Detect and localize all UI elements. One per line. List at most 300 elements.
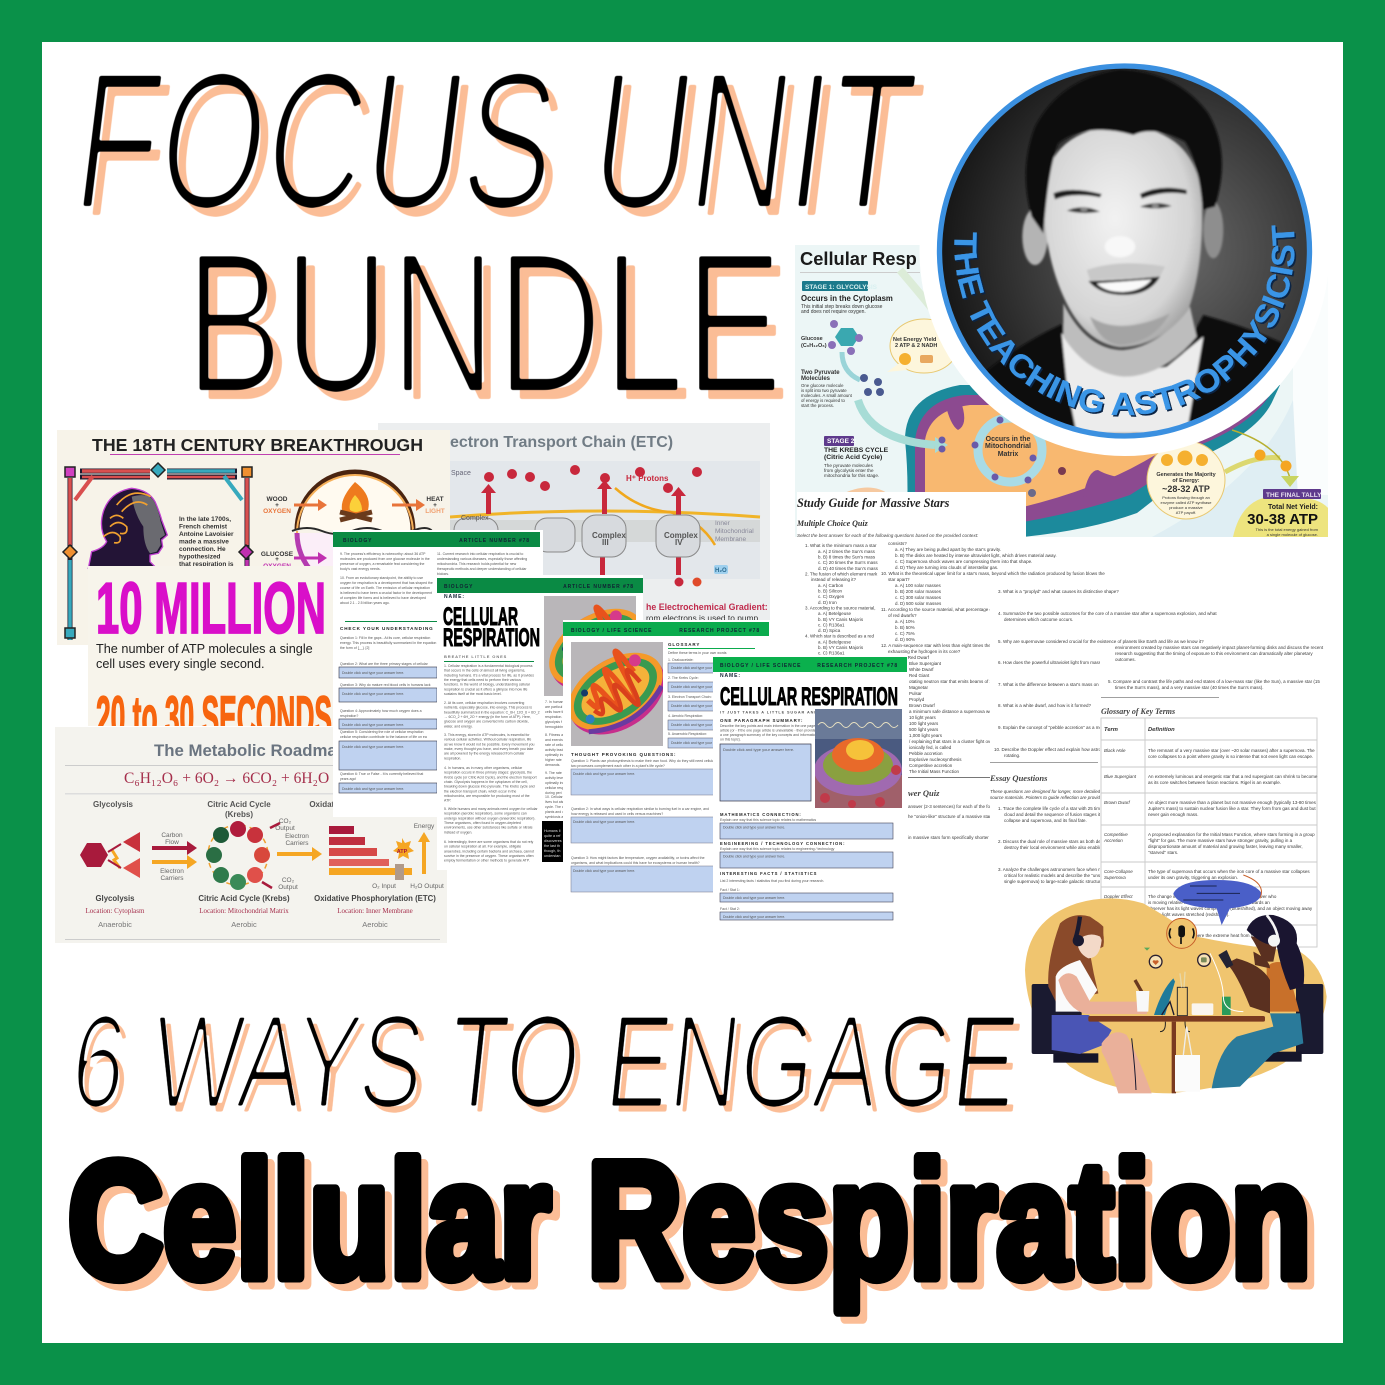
text block: article paragraphs: respiration. xyxy=(444,756,461,760)
quiz column two: otating neutron star that emits beams of X xyxy=(909,679,993,684)
quiz column one: 2. The fusion of which element mark xyxy=(805,572,878,576)
glossary table: "fight" for gas. The more massive stars have stronger gravity, pulling in a xyxy=(1148,838,1293,843)
text block: article paragraphs: chain. Glycolysis happens in the cytoplasm of the cell, xyxy=(444,780,528,784)
essay questions continued page xyxy=(1100,645,1324,947)
title: cellular respiration: RESPIRATION xyxy=(443,624,540,652)
callout: final tally: This is the total energy gained from xyxy=(1256,527,1319,532)
glossary table: Accretion xyxy=(1103,838,1123,843)
text block: article paragraphs: molecules are produced from one glucose molecule in the xyxy=(340,557,430,561)
icon: podcast microphone xyxy=(1167,918,1197,948)
text block: Lavoisier: hypothesized xyxy=(179,554,221,560)
big number: 10 million: 10 MILLION xyxy=(96,569,326,649)
form: comprehension questions xyxy=(339,636,437,793)
quiz column two: 100 light years xyxy=(909,721,939,726)
text block: article paragraphs: understanding various diseases, especially those affecting xyxy=(437,557,527,561)
panel: the 18th century breakthrough slide xyxy=(57,430,450,645)
quiz column three: short answer questions: determines which outcome occurs. xyxy=(1004,617,1073,622)
icon: glucose molecule: Glucose xyxy=(801,336,823,342)
quiz column two: c. C) 300 solar masses xyxy=(895,595,942,600)
text block: article paragraphs: nutrients, especially glucose, into energy. This process is xyxy=(444,706,532,710)
quiz column two: b. B) 50% xyxy=(895,625,915,630)
quiz column two: / explaining that stars in a cluster fight ove xyxy=(909,739,993,744)
illustration: two women with podcast xyxy=(1025,875,1327,1093)
text block: article paragraphs: 9. The process's efficiency is noteworthy: about 36 ATP xyxy=(340,552,426,556)
essay questions section: 3. Analyze the challenges astronomers face when modeling xyxy=(998,867,1117,872)
glossary table: observer has its light waves compressed (blueshifted), and an object moving away xyxy=(1148,906,1313,911)
text block: two pyruvate: One glucose molecule xyxy=(801,383,844,388)
table with laptop and items xyxy=(1088,953,1265,1093)
panel: article worksheet page two: BREATHE LITTLE ONES xyxy=(444,654,507,659)
text block: article paragraphs: 6. Interestingly, there are some organisms that do not rely xyxy=(444,840,533,844)
text: article side column: demands. xyxy=(545,763,560,767)
text: article side column: 8. Fitness a xyxy=(545,733,563,737)
text: article side column: during peri xyxy=(545,791,562,795)
form: thought questions: Double click and type your answer here. xyxy=(573,820,635,824)
form: comprehension questions: the form of [__]. [2] xyxy=(340,646,369,650)
header bar: life science research: RESEARCH PROJECT #78 xyxy=(679,628,760,634)
text block: article paragraphs: respiration (aerobic respiration), some organisms can xyxy=(444,812,527,816)
essay questions section: cloud and detail the sequence of fusion stages it goes through xyxy=(1004,812,1128,817)
form: thought questions: two processes complement each other in a plant's life cycle? xyxy=(571,764,665,768)
text block: article paragraphs: instead of oxygen. xyxy=(444,830,472,834)
callout: net energy yield: Net Energy Yield xyxy=(893,337,936,343)
icon: portrait of Lavoisier xyxy=(88,488,167,568)
text block: article paragraphs: that occurs in the cells of almost all living organisms, xyxy=(444,669,525,673)
panel: electron transport chain slide xyxy=(378,423,770,623)
text block: Lavoisier: connection. He xyxy=(179,546,226,553)
text block: article paragraphs: is believed to have been a crucial factor in the development xyxy=(340,591,432,595)
badge: stage 1: STAGE 1: GLYCOLYSIS xyxy=(805,284,878,291)
heading: cellular respiration poster: Cellular Resp xyxy=(800,248,917,269)
text block: article paragraphs: breaking down glucose into pyruvate. The Krebs cycle and xyxy=(444,785,535,789)
form: connections and facts: Fact / Stat 2: xyxy=(720,907,740,911)
one paragraph summary: Describe the key points and main information in the one page xyxy=(720,724,815,728)
callout: final tally xyxy=(1233,489,1330,537)
labels: pathway names and locations: Location: Inner Membrane xyxy=(337,907,413,915)
panel: electron transport chain slide: rom electrons is used to pump xyxy=(646,613,759,623)
quiz column one: c. C) Oxygen xyxy=(818,594,845,599)
header bar: biology article: ARTICLE NUMBER #78 xyxy=(459,538,530,544)
labels: pathway names and locations: Anaerobic xyxy=(98,920,132,929)
text block: two pyruvate: Molecules xyxy=(801,376,831,382)
labels: pathway names and locations xyxy=(86,894,436,929)
panel: electron transport chain slide: Mitochondrial xyxy=(715,528,754,535)
form: comprehension questions: Question 1: Fill in the gaps - At its core, cellular respiration xyxy=(340,636,430,640)
callout: majority of energy: ATP payoff. xyxy=(1176,510,1196,515)
arrows: carbon flow and electron carriers: Electron xyxy=(160,868,184,875)
diagram: electron transport staircase: Energy xyxy=(414,823,435,830)
glossary list: GLOSSARY xyxy=(668,642,700,647)
quiz column one: d. D) 40 times the Sun's mass xyxy=(818,566,879,571)
callout: majority of energy: Protons flowing through an xyxy=(1162,495,1210,500)
diagram: electron transport staircase: O₂ Input xyxy=(372,883,396,890)
quiz column two xyxy=(878,538,1105,774)
form: thought questions: how energy is released and used in cells versus machines? xyxy=(571,812,663,816)
quiz column one: b. B) VY Canis Majoris xyxy=(818,617,864,622)
diagram: combustion vs respiration: GLUCOSE xyxy=(261,551,294,558)
heading: metabolic roadmap: The Metabolic Roadmap xyxy=(154,741,347,760)
title: focus unit: FOCUS UNIT xyxy=(64,33,926,250)
text block: article paragraphs xyxy=(340,552,527,605)
quiz column two: White Dwarf xyxy=(909,667,934,672)
quiz column two: of red dwarfs? xyxy=(888,613,917,618)
text block: article paragraphs: survive in the presence of oxygen. These organisms often xyxy=(444,854,534,858)
text block: stage 2: The pyruvate molecules xyxy=(824,463,873,468)
text: article side column: activity leve xyxy=(545,776,563,780)
form: comprehension questions: Double click and type your answer here. xyxy=(342,787,404,791)
quiz column three: short answer questions: 5. Why are supernovae considered crucial for the existence of planets like Earth and life as we know it? xyxy=(998,639,1204,644)
glossary table: Core-Collapse xyxy=(1104,869,1133,874)
form: connections and facts: ENGINEERING / TECHNOLOGY CONNECTION: xyxy=(720,841,845,846)
quiz column three: short answer questions: 7. What is the difference between a star's mass on the main sequence xyxy=(998,682,1138,687)
heading: breakthrough: THE 18TH CENTURY BREAKTHROUGH xyxy=(92,435,423,455)
glossary list: 4. Aerobic Respiration: xyxy=(668,714,703,718)
glossary table: Blue Supergiant xyxy=(1104,774,1137,779)
quiz column two: d. D) 90% xyxy=(895,637,915,642)
form: connections and facts: Double click and type your answer here. xyxy=(723,854,785,858)
image: mitochondrion illustration xyxy=(553,635,680,751)
text: article side column xyxy=(545,700,566,819)
text block: article paragraphs: ATP. xyxy=(444,799,451,803)
quiz column two: consists? xyxy=(888,541,907,546)
panel: study guide for massive stars: Select the best answer for each of the following questions based on the provided context: xyxy=(797,533,979,538)
text block: article paragraphs: 5. While humans and many animals need oxygen for cellular xyxy=(444,807,538,811)
text: article side column: higher rate xyxy=(545,758,562,762)
text block: article paragraphs: → 6CO_2 + 6H_2O + energy (in the form of ATP). Here, xyxy=(444,715,531,719)
diagram: combustion vs respiration: OXYGEN xyxy=(263,508,291,515)
arrows: carbon flow and electron carriers: Carriers xyxy=(160,875,184,882)
essay questions section: single supernova) to large-scale galactic structures xyxy=(1004,879,1106,884)
diagram: mitochondrion: Occurs in the xyxy=(986,436,1030,443)
quiz column two: Pebble accretion xyxy=(909,751,943,756)
form: comprehension questions: years ago! xyxy=(340,777,356,781)
diagram: combustion vs respiration: HEAT xyxy=(426,496,444,503)
quiz column one: 4. Which star is described as a red xyxy=(805,634,875,638)
form: comprehension questions: Double click and type your answer here. xyxy=(342,692,404,696)
labels: pathway names and locations: Oxidative Phosphorylation (ETC) xyxy=(314,894,436,903)
text: article side column: glycolysis f xyxy=(545,720,562,724)
glossary list xyxy=(668,642,755,748)
quiz column one: 1. What is the minimum mass a star xyxy=(805,543,877,548)
quiz column one: c. C) 20 times the Sun's mass xyxy=(818,560,878,565)
text block: stage 2: THE KREBS CYCLE xyxy=(824,447,889,454)
glossary table: A proposed explanation for the Initial Mass Function, where stars forming in a group xyxy=(1148,832,1315,837)
text: article side column: activity lead xyxy=(545,748,563,752)
text block: cytoplasm: and does not require oxygen. xyxy=(801,309,866,315)
text block: article paragraphs xyxy=(444,664,540,863)
icon: glucose molecule xyxy=(801,320,863,380)
text block: two pyruvate: start the process. xyxy=(801,403,834,408)
heading: study guide: Study Guide for Massive Stars xyxy=(797,496,950,510)
panel: 10 million slide xyxy=(88,566,333,726)
panel: electron transport chain slide: Space xyxy=(451,470,471,477)
header bar: life science research xyxy=(563,622,769,636)
quiz column two: a. A) 10% xyxy=(895,619,915,624)
diagram: combustion vs respiration: WOOD xyxy=(267,496,288,503)
quiz column one: b. B) VY Canis Majoris xyxy=(818,645,864,650)
glossary table: A massive supernova where the extreme heat from the xyxy=(1148,933,1258,938)
diagram: combustion vs respiration: + xyxy=(275,556,279,563)
callout: black fact box: quite a ref xyxy=(544,834,561,838)
text block: article paragraphs: mitochondria, are responsible for producing most of the xyxy=(444,794,530,798)
text block: article paragraphs: are all powered by the energy released from cellular xyxy=(444,752,525,756)
quiz column two: 12. A main-sequence star with less than eight times the xyxy=(881,643,991,648)
callout: black fact box: though, th xyxy=(544,849,560,853)
callout: net energy yield xyxy=(887,319,958,373)
quiz column one: c. C) R136a1 xyxy=(818,622,845,628)
one paragraph summary xyxy=(720,718,817,801)
callout: final tally: THE FINAL TALLY xyxy=(1266,492,1322,499)
callout: majority of energy: Generates the Majority xyxy=(1156,472,1217,478)
form: connections and facts: Double click and type your answer here. xyxy=(723,896,785,900)
title: bundle: BUNDLE xyxy=(185,212,783,435)
form: thought questions: Double click and type your answer here. xyxy=(573,772,635,776)
labels: pathway names and locations: Location: Mitochondrial Matrix xyxy=(199,907,289,915)
text block: two pyruvate: of energy is required to xyxy=(801,398,846,403)
form: connections and facts: Double click and type your answer here. xyxy=(723,826,785,830)
panel: metabolic roadmap slide: Citric Acid Cycle xyxy=(207,800,271,809)
text: short answer quiz fragments xyxy=(908,777,991,840)
text block: Lavoisier: In the late 1700s, xyxy=(179,516,231,523)
text: article side column: 9. The rate xyxy=(545,771,562,775)
text block: Lavoisier: made a massive xyxy=(179,538,229,546)
text: short answer quiz fragments: in massive stars form specifically shorter xyxy=(908,835,989,840)
glossary list: Double click and type your answer here. xyxy=(671,741,733,745)
text block: article paragraphs: course of life on Earth. The emission of cellular respiration xyxy=(340,586,430,590)
callout: majority of energy xyxy=(1147,441,1225,519)
form: connections and facts: Explain one way that this science topic relates to engineering / technology xyxy=(720,847,835,851)
arrows: carbon flow and electron carriers: Carbon xyxy=(161,832,183,839)
text block: article paragraphs: biology. xyxy=(437,572,449,576)
diagram: mitochondrion: Matrix xyxy=(998,451,1018,458)
text: 20 to 30 SECONDS xyxy=(96,685,332,750)
text block: article paragraphs: of complex life forms and is believed to have developed xyxy=(340,596,426,600)
header bar: biology article xyxy=(333,532,540,547)
header bar: research project: BIOLOGY / LIFE SCIENCE xyxy=(720,663,801,669)
quiz column two: Magnetar xyxy=(909,685,929,690)
glossary table: "starved" stars. xyxy=(1148,850,1178,855)
header bar: biology article number: ARTICLE NUMBER #78 xyxy=(563,584,634,590)
text block: article paragraphs: on cellular respiration at all. For example, obligate xyxy=(444,845,521,849)
image: mitochondrion illustration xyxy=(544,596,636,696)
panel: electron transport chain slide: H₂O xyxy=(715,568,727,574)
quiz column three: short answer questions: 6. How does the powerful ultraviolet light from massive stars affect xyxy=(998,660,1131,665)
form: comprehension questions: cellular respiration contribute to the balance of life on ea xyxy=(340,735,427,739)
form: connections and facts: Explain one way that this science topic relates to mathematics xyxy=(720,818,816,822)
header bar: research project xyxy=(713,657,907,672)
essay questions continued page: 5. Compare and contrast the life paths and end states of a low-mass star (like the Sun), a massive star (15 xyxy=(1108,679,1320,684)
text block: article paragraphs: 3. This energy, stored in ATP molecules, is essential for xyxy=(444,733,530,737)
panel: cellular respiration poster xyxy=(795,245,1333,538)
panel: metabolic roadmap slide: (Krebs) xyxy=(225,810,253,819)
text: short answer quiz fragments: wer Quiz xyxy=(908,788,940,798)
figure: woman on right xyxy=(1212,915,1323,1088)
glossary table: An extremely luminous and energetic star that a red supergiant can shrink to become xyxy=(1148,774,1318,779)
speech bubble xyxy=(1173,875,1262,925)
text block: article paragraphs: as we know it would not be possible. Every movement you xyxy=(444,742,535,746)
title: cellular respiration xyxy=(443,603,540,652)
form: connections and facts: INTERESTING FACTS / STATISTICS xyxy=(720,871,817,876)
glossary table xyxy=(1101,718,1318,947)
text block: Lavoisier: that respiration is xyxy=(179,561,234,568)
text block: article paragraphs: 2. At its core, cellular respiration involves converting xyxy=(444,701,524,705)
glossary table: has its light waves stretched (redshifted). xyxy=(1148,912,1230,917)
glossary table: The type of supernova that occurs when the iron core of a massive star collapses xyxy=(1148,869,1310,874)
diagram: combustion vs respiration: LIGHT xyxy=(425,508,445,515)
form: comprehension questions: Question 4: Approximately how much oxygen does a xyxy=(340,709,422,713)
quiz column two: Blue Supergiant xyxy=(909,661,942,666)
glossary list: Define these terms in your own words xyxy=(668,651,727,655)
text block: article paragraphs: anaerobes, including certain bacteria and archaea, cannot xyxy=(444,849,534,853)
diagram: electron transport staircase xyxy=(329,823,444,890)
title: focus unit xyxy=(64,33,935,259)
quiz column three: short answer questions: 8. What is a white dwarf, and how is it formed? xyxy=(998,703,1092,708)
quiz column two: Competitive accretion xyxy=(909,763,953,768)
form: thought questions: organisms, and what implications could this have for ecosystems or human health? xyxy=(571,861,700,865)
callout: black fact box: Humans li xyxy=(544,829,561,833)
essay questions section: destroy their local environment while also enabling xyxy=(1004,845,1105,850)
glossary table: Black Hole xyxy=(1104,748,1126,753)
glossary list: 5. Anaerobic Respiration: xyxy=(668,732,707,736)
text block: article paragraphs: environments, use other substances like sulfate or nitrate xyxy=(444,826,533,830)
one paragraph summary: Double click and type your answer here. xyxy=(723,747,794,752)
labels: pathway names and locations: Citric Acid Cycle (Krebs) xyxy=(198,894,290,903)
title: focus unit: FOCUS UNIT xyxy=(73,42,935,259)
diagram: electron transport staircase: H₂O Output xyxy=(410,883,444,890)
panel: metabolic roadmap slide: Glycolysis xyxy=(93,800,134,809)
header bar: life science research: BIOLOGY / LIFE SCIENCE xyxy=(571,628,652,634)
arrow: electron carriers: Carriers xyxy=(285,840,309,847)
quiz column two: c. C) Supernova shock waves are compressing them into that shape. xyxy=(895,559,1032,564)
callout: majority of energy: ~28-32 ATP xyxy=(1162,484,1210,494)
quiz column one: b. B) 8 times the Sun's mass xyxy=(818,554,876,560)
image: glowing mitochondrion xyxy=(814,709,902,808)
essay questions section: Essay Questions xyxy=(989,773,1048,783)
text block: article paragraphs: 4. In humans, as in many other organisms, cellular xyxy=(444,766,523,770)
glossary table: Term xyxy=(1104,727,1118,733)
diagram: citric acid cycle ring: Output xyxy=(275,825,295,832)
text block: article paragraphs: oxygen for respiration is a development that has shaped the xyxy=(340,581,433,585)
diagram: citric acid cycle ring: CO₂ xyxy=(279,818,292,825)
arrow: electron carriers xyxy=(277,833,322,861)
quiz column two: a minimum safe distance a supernova wo xyxy=(909,709,992,714)
one paragraph summary: article (or - if the one page article is unavailable - then provide xyxy=(720,728,816,732)
text block: Lavoisier: French chemist xyxy=(179,524,228,530)
text block: two pyruvate xyxy=(801,370,884,408)
text: article side column: plants and o xyxy=(545,810,564,814)
text block: article paragraphs: glucose and oxygen are converted into carbon dioxide, xyxy=(444,720,529,724)
diagram: glycolysis xyxy=(80,832,140,878)
glossary list: 1. Oxaloacetate: xyxy=(668,658,694,662)
header bar: biology article: BIOLOGY xyxy=(343,538,372,544)
callout: majority of energy: enzyme called ATP synthase xyxy=(1160,500,1212,505)
callout: net energy yield: 2 ATP & 2 NADH xyxy=(895,343,937,349)
diagram: combustion vs respiration xyxy=(261,470,445,566)
text block: cytoplasm xyxy=(801,294,893,315)
glossary list: 2. The Krebs Cycle: xyxy=(668,676,699,680)
panel: metabolic roadmap slide xyxy=(55,727,447,943)
text block: article paragraphs: water, and energy. xyxy=(444,724,473,728)
form: comprehension questions: Double click and type your answer here. xyxy=(342,745,404,749)
panel: electron transport chain slide: III xyxy=(602,538,609,547)
quiz column two: 1,000 light years xyxy=(909,733,943,738)
quiz column two: a. A) They are being pulled apart by the star's gravity. xyxy=(895,547,1001,552)
essay questions section: source materials. Pointers to guide reflection are provided xyxy=(990,795,1106,800)
glossary table: as its core switches between fusion reactions. Rigel is an example. xyxy=(1148,780,1281,785)
panel: electron transport chain slide: Complex xyxy=(592,531,626,540)
diagram: mitochondrion xyxy=(840,385,1280,538)
panel: article worksheet page two: NAME: xyxy=(444,594,465,600)
text block: article paragraphs: respiration occurs in three primary stages: glycolysis, the xyxy=(444,771,532,775)
quiz column one: a. A) Carbon xyxy=(818,583,844,588)
quiz column one: instead of releasing it? xyxy=(811,577,857,582)
panel: article worksheet page one xyxy=(333,530,543,817)
panel: electron transport chain slide: IV xyxy=(675,538,683,547)
quiz column three: short answer questions: 4. Summarize the two possible outcomes for the core of a massive star after a supernova explosion, and what xyxy=(998,611,1217,616)
callout: majority of energy: of Energy: xyxy=(1172,478,1200,484)
text block: article paragraphs: about 2.1 - 2.5 billion years ago. xyxy=(340,601,390,605)
text block: stage 2: STAGE 2: xyxy=(827,438,856,445)
quiz column two: d. D) They are turning into clouds of interstellar gas. xyxy=(895,565,998,570)
text block: stage 2: (Citric Acid Cycle) xyxy=(824,454,882,461)
text block: cytoplasm: Occurs in the Cytoplasm xyxy=(801,294,893,303)
glossary list: Double click and type your answer here. xyxy=(671,666,733,670)
glossary table: Brown Dwarf xyxy=(1104,800,1131,805)
form: connections and facts: Double click and type your answer here. xyxy=(723,915,785,919)
quiz column two: 11. According to the source material, what percentage o xyxy=(881,607,992,612)
text block: ATP usage: cell uses every single second. xyxy=(96,657,265,671)
text: article side column: respiration. xyxy=(545,715,562,719)
form: connections and facts: List 2 interesting facts / statistics that you find during your research. xyxy=(720,879,824,883)
form: thought questions xyxy=(571,759,716,892)
text block: ATP usage: The number of ATP molecules a single xyxy=(96,642,313,656)
glossary table: Supernova xyxy=(1104,875,1126,880)
text block: article paragraphs: These organisms, often found in oxygen-depleted xyxy=(444,821,521,825)
icons: heart and thumbs up xyxy=(1144,948,1210,968)
diagram: combustion vs respiration: OXYGEN xyxy=(263,563,291,570)
quiz column two: Explosive nucleosynthesis xyxy=(909,757,962,762)
text block: article paragraphs: respiration is crucial as it offers a glimpse into how life xyxy=(444,687,527,691)
text block: cytoplasm: This initial step breaks down glucose xyxy=(801,304,883,310)
diagram: electron transport staircase: ATP xyxy=(397,849,408,855)
text block: article paragraphs: sustains itself at the most basic level. xyxy=(444,692,502,696)
panel: research project page two: NAME: xyxy=(720,673,741,679)
one paragraph summary: on this topic). xyxy=(720,738,741,742)
quiz column one: c. C) R136a1 xyxy=(818,650,845,656)
quiz column three: short answer questions: 3. What is a "proplyd" and what causes its distinctive shape? xyxy=(998,589,1119,594)
text block: ATP usage xyxy=(96,642,313,671)
labels: pathway names and locations: Location: Cytoplasm xyxy=(86,907,145,915)
text: article side column: are particul xyxy=(545,705,563,709)
text block: two pyruvate: molecules. A small amount xyxy=(801,393,853,398)
callout: final tally: 30-38 ATP xyxy=(1247,511,1318,528)
quiz column two: Pulsar xyxy=(909,691,922,696)
text block: article paragraphs: various cellular activities. Without cellular respiration, life xyxy=(444,738,531,742)
heading: glossary of key terms: Glossary of Key Terms xyxy=(1101,707,1175,716)
glossary list: Double click and type your answer here. xyxy=(671,723,733,727)
essay questions section: 1. Trace the complete life cycle of a star with 25 times the Sun's mass xyxy=(998,806,1137,811)
header bar: biology article number xyxy=(437,578,643,593)
glossary table: under its own gravity, triggering an explosion. xyxy=(1148,875,1238,880)
decorative frame xyxy=(63,463,253,640)
text: article side column: symbiosis a xyxy=(545,815,563,819)
text block: article paragraphs: Krebs cycle (or Citric Acid Cycle), and the electron transport xyxy=(444,775,537,779)
form: thought questions: Question 1: Plants use photosynthesis to make their own food. Why do they still need cellular xyxy=(571,759,716,763)
essay questions section: 2. Discuss the dual role of massive stars as both destroyers xyxy=(998,839,1118,844)
text block: article paragraphs: employ fermentation or other methods to generate ATP. xyxy=(444,859,530,863)
text: article side column: cells have th xyxy=(545,710,565,714)
text block: article paragraphs: functions. In the world of biology, understanding cellular xyxy=(444,683,531,687)
